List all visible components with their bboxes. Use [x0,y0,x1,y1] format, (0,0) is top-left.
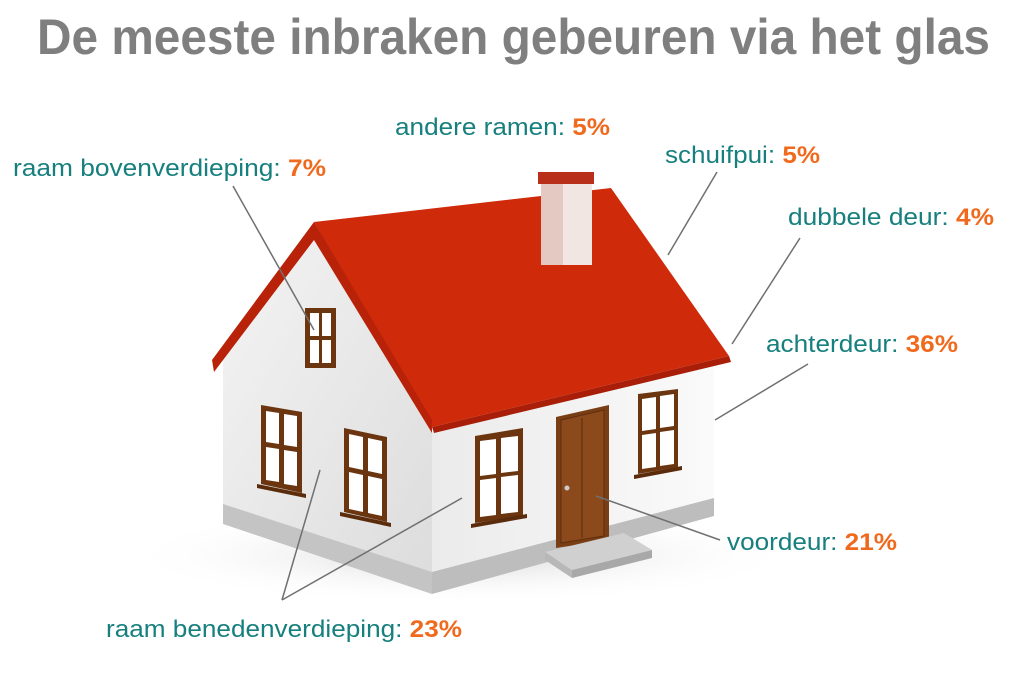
label: schuifpui: schuifpui: 5% [665,142,820,169]
front wall [432,362,714,574]
label: voordeur [596,496,897,556]
house [120,172,800,605]
base front [432,498,714,594]
steps [545,533,652,578]
label: raam benedenverdieping [106,470,462,643]
roof [212,188,731,433]
gable wall [223,232,432,592]
label: andere ramen: andere ramen: 5% [395,114,610,141]
door [556,405,609,548]
gable windows [257,405,391,527]
label: raam benedenverdieping: raam benedenverdieping: 23% [106,616,462,643]
label: schuifpui [665,142,820,255]
chimney [538,172,594,265]
label: raam bovenverdieping: raam bovenverdieping: 7% [13,155,326,182]
label: achterdeur [715,331,958,420]
label: dubbele deur: dubbele deur: 4% [788,204,994,231]
label: dubbele deur [732,204,994,344]
base gable [223,504,432,594]
upper window [305,308,336,368]
title: De meeste inbraken gebeuren via het glas [37,9,990,65]
label: raam bovenverdieping [13,155,326,330]
label: achterdeur: achterdeur: 36% [766,331,958,358]
front windows [471,389,682,528]
label: voordeur: voordeur: 21% [727,529,897,556]
